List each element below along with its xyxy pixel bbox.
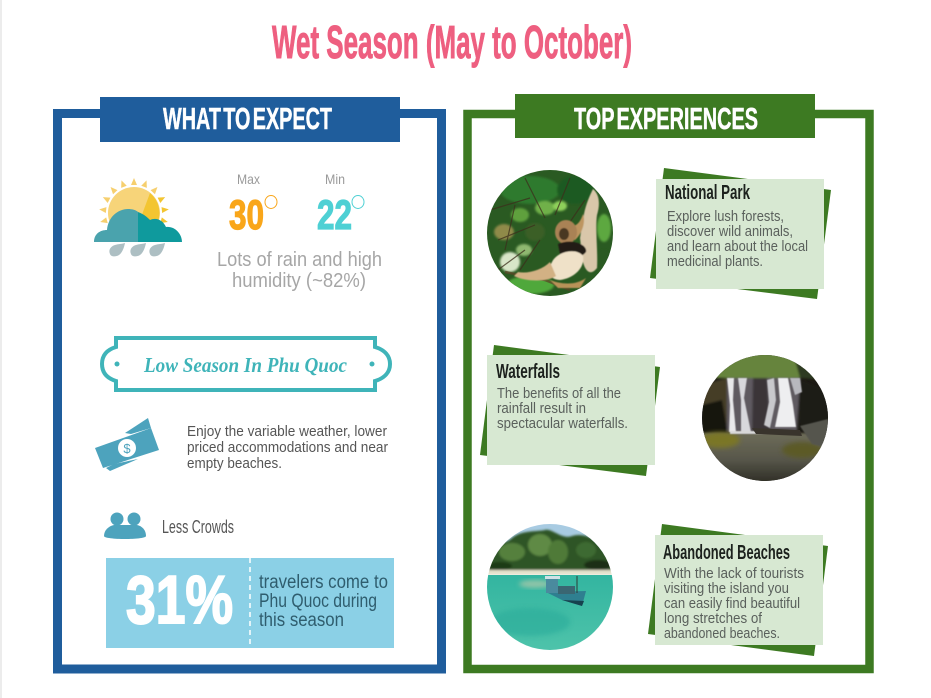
max temperature <box>229 171 277 238</box>
panel: what to expect <box>58 97 442 669</box>
min temperature <box>317 171 364 238</box>
less crowds label: Less Crowds <box>162 517 234 537</box>
card: waterfalls: rainfall result in <box>497 400 586 417</box>
boat <box>545 576 586 606</box>
low season description: priced accommodations and near <box>187 439 388 456</box>
card: waterfalls: The benefits of all the <box>497 385 621 402</box>
stat box: 31%: this season <box>259 610 344 631</box>
icon: banknotes: $ <box>123 441 131 456</box>
low season description: Enjoy the variable weather, lower <box>187 423 387 440</box>
card: national park: and learn about the local <box>667 238 808 255</box>
banner: low season in phu quoc: Low Season In Phu Quoc <box>143 353 348 377</box>
stat box: 31%: Phu Quoc during <box>259 591 377 612</box>
photo: gibbon in forest <box>487 170 613 296</box>
card: national park: discover wild animals, <box>667 223 793 240</box>
card: abandoned beaches: visiting the island you <box>664 580 789 597</box>
card: abandoned beaches: can easily find beautiful <box>664 595 800 612</box>
card: waterfalls: Waterfalls <box>496 361 560 383</box>
icon: banknotes <box>95 418 159 471</box>
photo: waterfall <box>700 352 830 485</box>
min temperature: Min <box>325 171 345 187</box>
low season description <box>187 423 388 472</box>
low season description: empty beaches. <box>187 455 282 472</box>
banner: low season in phu quoc <box>102 338 390 390</box>
weather description <box>217 249 382 292</box>
stat box: 31%: travelers come to <box>259 572 388 593</box>
weather description: humidity (~82%) <box>232 270 366 292</box>
stat box: 31% <box>106 558 394 648</box>
heading: top experiences: TOP EXPERIENCES <box>574 101 758 136</box>
card: national park: medicinal plants. <box>667 253 763 270</box>
card: national park <box>650 168 831 299</box>
panel: top experiences <box>468 94 870 669</box>
weather description: Lots of rain and high <box>217 249 382 271</box>
photo: beach with boat <box>487 524 613 651</box>
card: waterfalls <box>480 345 660 476</box>
card: abandoned beaches: abandoned beaches. <box>664 625 780 642</box>
icon: people <box>104 512 146 539</box>
card: abandoned beaches: Abandoned Beaches <box>663 542 790 564</box>
card: waterfalls: spectacular waterfalls. <box>497 415 628 432</box>
card: abandoned beaches <box>648 524 828 656</box>
title: Wet Season (May to October) <box>272 16 632 68</box>
max temperature: 30 <box>229 191 264 238</box>
heading: top experiences <box>515 94 815 138</box>
max temperature: Max <box>237 171 260 187</box>
stat box: 31%: 31% <box>126 562 233 638</box>
card: abandoned beaches: long stretches of <box>664 610 763 627</box>
heading: what to expect: WHAT TO EXPECT <box>163 101 332 136</box>
min temperature: 22 <box>317 191 352 238</box>
heading: what to expect <box>100 97 400 142</box>
card: abandoned beaches: With the lack of tourists <box>664 565 804 582</box>
icon: sun behind rain cloud <box>94 178 182 256</box>
card: national park: National Park <box>665 182 751 204</box>
card: national park: Explore lush forests, <box>667 208 784 225</box>
